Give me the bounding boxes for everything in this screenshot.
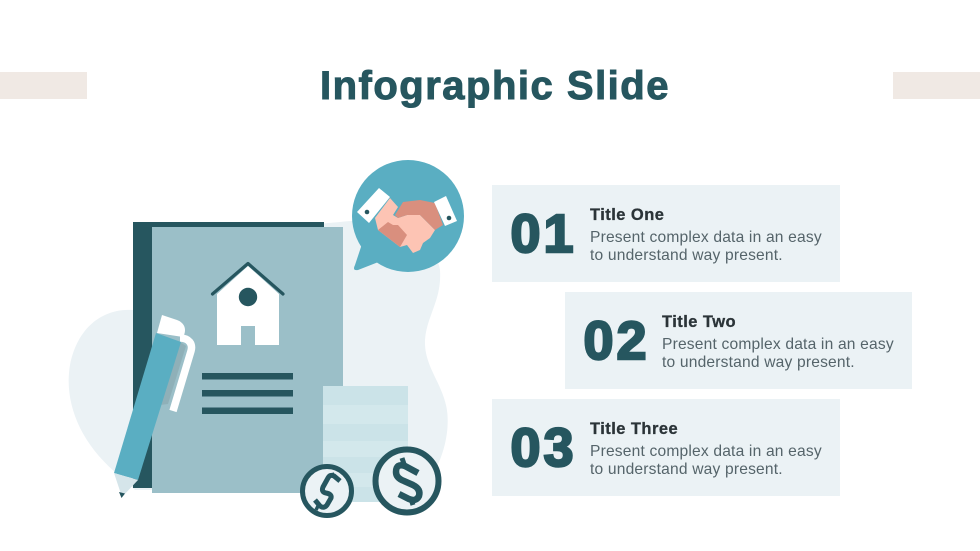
text: title three: to understand way present. [590,460,783,478]
icon: pen [114,315,192,498]
panel: item 01 [492,185,840,282]
document back cover [133,222,324,488]
text: title one: Title One [590,206,664,224]
speech bubble with handshake [352,160,464,272]
text: title one [590,206,822,264]
number 03: 03 [510,418,577,478]
document text lines [202,373,293,414]
title: Infographic Slide [320,64,670,108]
stacked banknotes [323,386,408,502]
icon: house [212,264,283,345]
text: title three [590,420,822,478]
text: title two [662,313,894,370]
document front page [152,227,343,493]
text: title two: Present complex data in an easy [662,336,894,353]
speech bubble [352,160,464,272]
text: title two: Title Two [662,313,736,331]
text: title one: Present complex data in an easy [590,229,822,246]
text: title two: to understand way present. [662,354,855,370]
number 02: 02 [584,311,650,371]
icon: small coin [302,466,352,516]
right banner [893,72,980,99]
panel: item 03 [492,399,840,496]
icon: handshake [357,188,457,253]
text: title three: Title Three [590,420,678,438]
text: title one: to understand way present. [590,246,783,264]
background blob [69,221,448,490]
left banner [0,72,87,99]
number 01: 01 [510,204,577,264]
panel: item 02 [565,292,912,389]
icon: large coin [376,450,438,512]
text: title three: Present complex data in an easy [590,443,822,460]
